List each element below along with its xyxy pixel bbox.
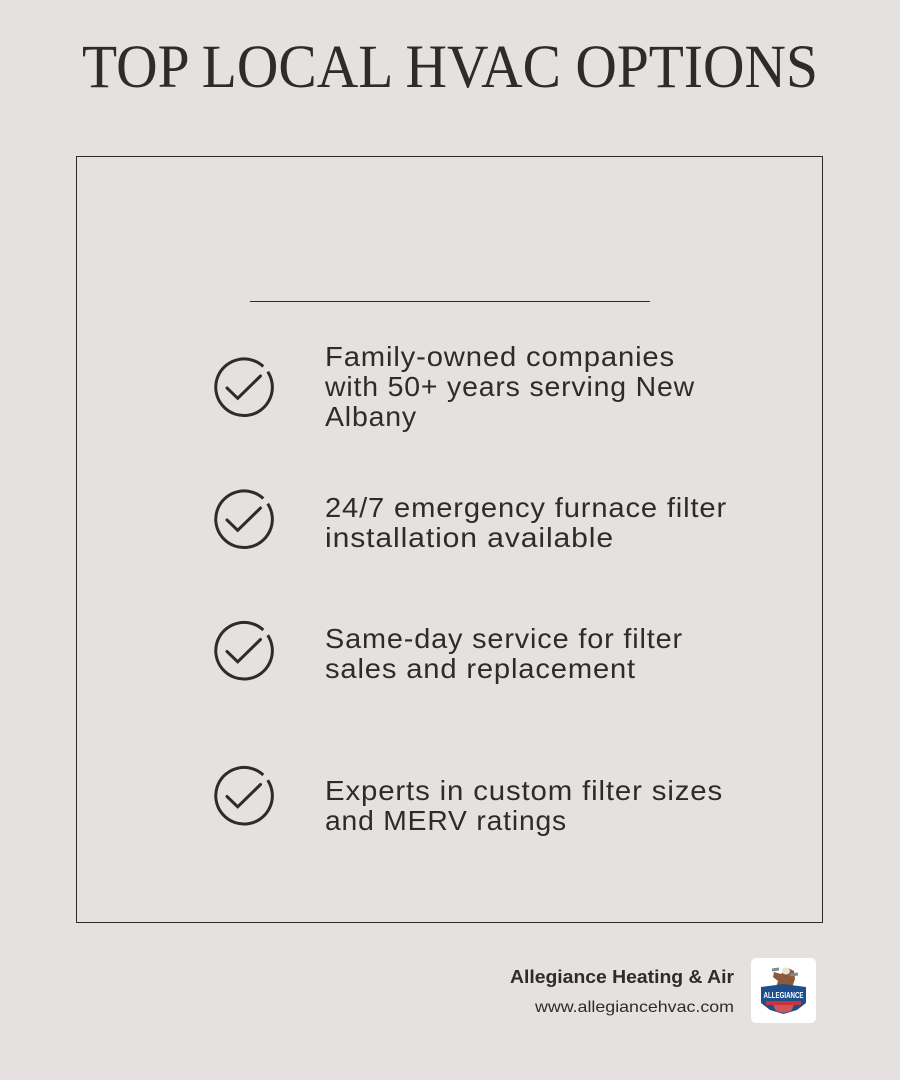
- text: same-day service: Same-day service for filter: [325, 623, 683, 654]
- title: TOP LOCAL HVAC OPTIONS: [82, 34, 818, 101]
- text: family-owned companies: Albany: [325, 401, 417, 432]
- divider line: [250, 301, 650, 302]
- text: custom filter experts: and MERV ratings: [325, 805, 567, 836]
- text: family-owned companies: with 50+ years serving New: [324, 371, 695, 402]
- logo ribbon: [766, 1001, 801, 1005]
- text: family-owned companies: [324, 341, 695, 432]
- logo: Allegiance badge: [751, 958, 816, 1023]
- text: same-day service: sales and replacement: [325, 653, 636, 684]
- text: same-day service: [325, 623, 683, 684]
- eagle mascot: [772, 968, 798, 990]
- text: emergency installation: installation available: [325, 522, 614, 553]
- shield stripes: [773, 1005, 794, 1013]
- shield: [761, 984, 806, 1014]
- text: custom filter experts: [325, 775, 723, 836]
- text: emergency installation: [325, 492, 727, 553]
- panel: options frame: [76, 156, 822, 922]
- text: emergency installation: 24/7 emergency furnace filter: [325, 492, 727, 523]
- logo wordmark: ALLEGIANCE: [764, 991, 804, 1000]
- footer website: www.allegiancehvac.com: [534, 999, 734, 1016]
- text: family-owned companies: Family-owned companies: [325, 341, 675, 372]
- icon: check 1: [216, 359, 272, 416]
- icon: check 3: [216, 622, 272, 679]
- text: custom filter experts: Experts in custom filter sizes: [325, 775, 723, 806]
- icon: check 2: [216, 491, 272, 548]
- icon: check 4: [216, 767, 272, 824]
- footer company name: Allegiance Heating & Air: [510, 967, 734, 987]
